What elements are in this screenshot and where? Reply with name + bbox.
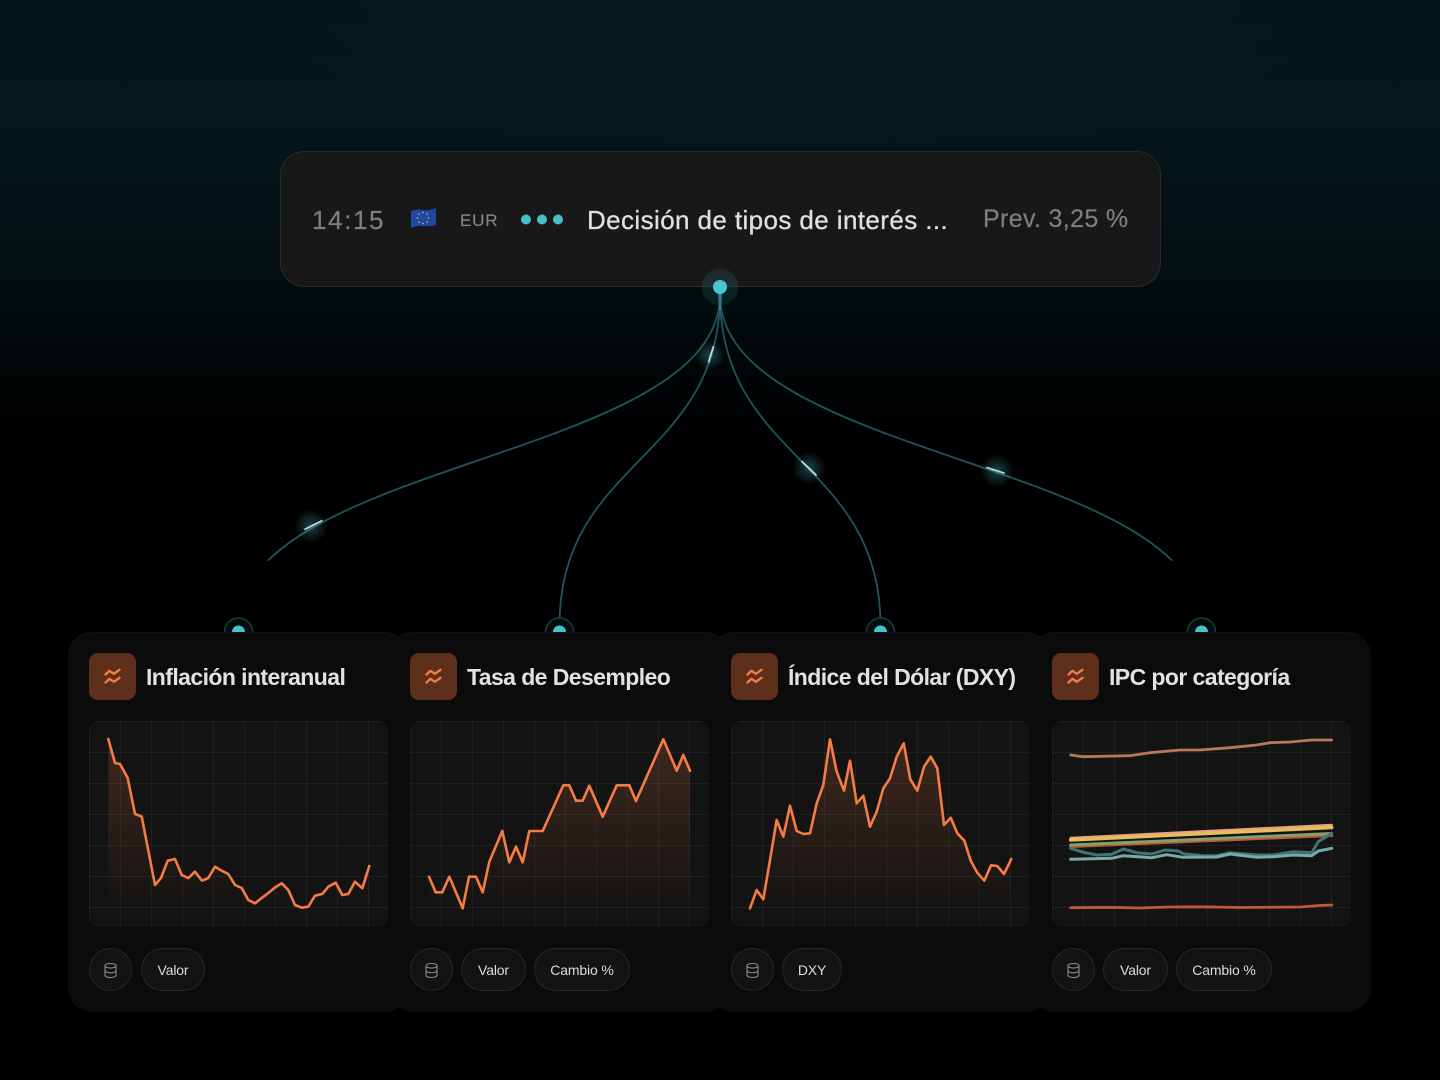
line to Inflación: [266, 303, 719, 560]
line chart: [410, 721, 709, 927]
chip: Valor: Valor: [158, 962, 188, 978]
chip: Valor: [1103, 948, 1168, 991]
line to DXY: [720, 295, 880, 625]
line chart: [89, 721, 388, 927]
panel: Tasa de Desempleo: [389, 632, 729, 1012]
event time: 14:15: [312, 205, 385, 235]
chip: Valor: [461, 948, 526, 991]
panel: Inflación interanual: [68, 632, 408, 1012]
panel: Índice del Dólar: [710, 632, 1050, 1012]
line to IPC: [721, 303, 1173, 560]
chip: DXY: [782, 948, 842, 991]
heading: IPC por categoría: [1109, 664, 1290, 690]
icon: trend: [1052, 653, 1099, 700]
connection lines: [224, 268, 1216, 632]
line chart: [731, 721, 1030, 927]
panel: IPC por categoría: [1031, 632, 1371, 1012]
chip: Cambio %: [1176, 948, 1272, 991]
chip: data icon: [1052, 948, 1095, 991]
source node: [702, 268, 738, 310]
previous value: Prev. 3,25 %: [983, 205, 1128, 233]
heading: Índice del Dólar (DXY): [788, 664, 1016, 690]
icon: trend: [89, 653, 136, 700]
chip: Cambio %: Cambio %: [550, 962, 614, 978]
multi-line chart: [1052, 721, 1351, 927]
pulses on lines: [294, 340, 1014, 543]
chip: Valor: Valor: [1120, 962, 1151, 978]
chip: Valor: Valor: [478, 962, 509, 978]
chip: Valor: [141, 948, 205, 991]
heading: Tasa de Desempleo: [467, 664, 670, 690]
event card: [280, 151, 1161, 287]
chip: Cambio %: Cambio %: [1192, 962, 1256, 978]
chip: data icon: [410, 948, 453, 991]
target nodes: [224, 618, 1216, 646]
chip: data icon: [89, 948, 132, 991]
heading: Inflación interanual: [146, 664, 345, 690]
chip: data icon: [731, 948, 774, 991]
currency: EUR: [460, 211, 498, 230]
icon: EU flag: [411, 208, 436, 228]
line to Desempleo: [560, 295, 720, 625]
chip: Cambio %: [534, 948, 630, 991]
importance dots: [521, 214, 563, 224]
event name: Decisión de tipos de interés ...: [587, 205, 948, 235]
icon: trend: [731, 653, 778, 700]
chip: DXY: DXY: [798, 962, 826, 978]
icon: trend: [410, 653, 457, 700]
